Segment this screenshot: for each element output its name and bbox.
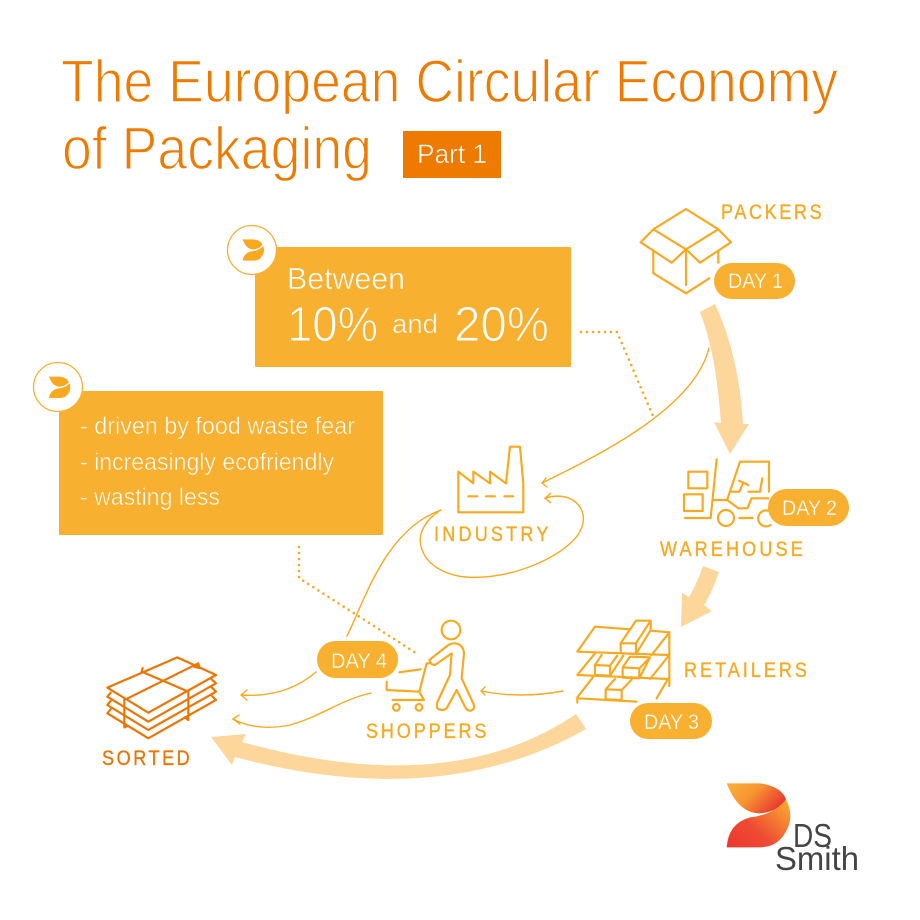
pill: day 3 [630,703,712,739]
callout: shoppers traits: - increasingly ecofriendly [80,449,334,476]
icon: badge for shoppers callout [34,362,82,412]
arrow: packers to warehouse [700,304,749,454]
logo: DS Smith: Smith [775,840,859,877]
dotted connector: traits callout to shoppers [299,547,416,653]
label: shoppers: SHOPPERS [366,720,486,743]
arrow: shoppers to sorted [233,693,371,727]
callout: between 10% and 20%: and [392,309,438,339]
title: The European Circular Economy [61,48,838,115]
badge: part 1 [403,131,501,178]
icon: forklift [684,459,771,526]
pill: day 1: DAY 1 [728,270,783,293]
callout: between 10% and 20%: 20% [454,298,549,352]
logo: DS Smith: DS [793,817,832,854]
pill: day 2 [768,489,849,526]
logo: DS Smith [727,783,859,877]
arrow: retailers to sorted [211,714,586,779]
label: sorted: SORTED [102,747,190,770]
pill: day 1 [714,263,795,299]
pill: day 4 [317,641,398,678]
label: retailers: RETAILERS [684,659,807,682]
pill: day 2: DAY 2 [782,497,837,520]
arrow: day 4 to sorted [241,672,316,700]
arrow: shoppers through loop to industry [347,493,583,636]
arrow: warehouse to retailers [681,566,719,627]
dotted connector: percentage callout to industry [581,332,653,416]
callout: between 10% and 20%: Between [287,261,405,296]
icon: packers box [641,209,731,293]
pill: day 3: DAY 3 [644,711,699,734]
label: warehouse: WAREHOUSE [660,538,803,561]
icon: shopper with cart [387,621,474,711]
callout: shoppers traits: - driven by food waste fear [80,413,355,440]
title [61,48,838,182]
title: of Packaging [62,115,372,182]
callout: between 10% and 20% [255,247,571,367]
badge: part 1: Part 1 [417,139,487,169]
icon: sorted stack [107,657,216,738]
icon: badge for percentage callout [228,226,276,274]
arrow: packers to industry [542,348,709,487]
label: packers: PACKERS [721,201,822,224]
icon: factory [458,447,523,512]
callout: between 10% and 20%: 10% [287,298,378,352]
arrow: retailers to shoppers [481,687,563,695]
callout: shoppers traits: - wasting less [80,484,220,511]
icon: retail shelves [577,621,669,703]
callout: shoppers traits [59,391,383,535]
label: industry: INDUSTRY [434,523,548,546]
pill: day 4: DAY 4 [331,650,387,673]
